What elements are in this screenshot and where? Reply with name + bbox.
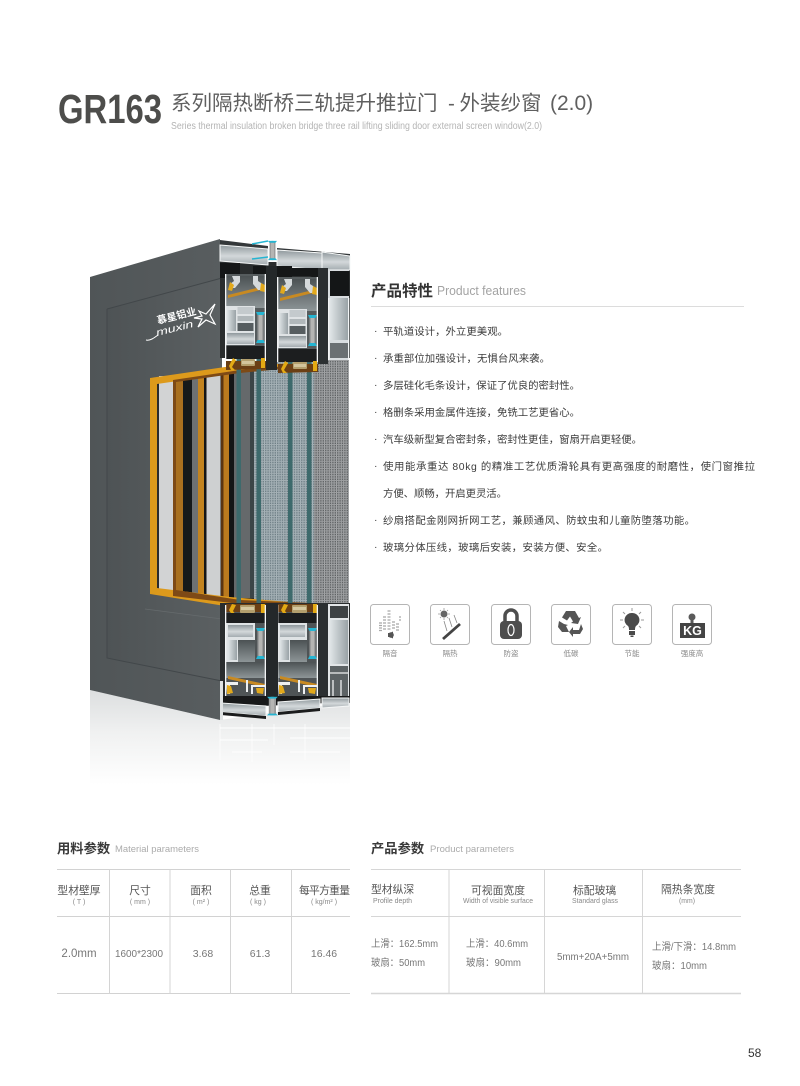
top rail [220, 245, 268, 265]
model number: GR163 [58, 86, 162, 132]
icon: sound insulation: 隔音 [382, 648, 398, 658]
brand logo: muxin [155, 319, 195, 339]
material table: ( kg/m² ) [311, 899, 337, 906]
icon: energy saving bulb [612, 604, 652, 658]
product table: 可视面宽度 [471, 883, 525, 897]
icon: energy saving bulb: 节能 [624, 648, 640, 658]
material table: 总重 [249, 883, 271, 897]
material heading: 用料参数 [57, 840, 111, 856]
material heading: Material parameters [115, 844, 199, 855]
product table: 5mm+20A+5mm [557, 952, 629, 963]
icon: anti-theft lock: 防盗 [504, 648, 519, 658]
material table: ( mm ) [130, 899, 150, 906]
material table: 型材壁厚 [57, 883, 101, 897]
chinese title: 外装纱窗 [460, 92, 542, 115]
features list: 格删条采用金属件连接，免铣工艺更省心。 [383, 406, 580, 419]
product table: (mm) [679, 896, 695, 905]
material heading [57, 840, 199, 856]
icon: heat insulation: 隔热 [442, 648, 458, 658]
orange thermal frame [150, 362, 312, 606]
icon: high strength weight: KG [683, 624, 702, 638]
features list: 平轨道设计，外立更美观。 [383, 325, 508, 338]
product table: 上滑：162.5mm [371, 938, 438, 950]
features heading [371, 281, 744, 307]
product table: 上滑：40.6mm [466, 938, 528, 950]
features list: · [374, 380, 377, 391]
material table: 3.68 [193, 948, 213, 960]
material table: 61.3 [250, 948, 270, 960]
top profile section [220, 240, 350, 373]
icon: low carbon recycling: 低碳 [564, 648, 579, 658]
icon: high strength weight [672, 604, 712, 658]
product table [371, 869, 741, 994]
insect screen mesh [254, 358, 349, 606]
product table: Width of visible surface [463, 896, 533, 905]
material table [57, 869, 350, 994]
material table: 16.46 [311, 948, 337, 960]
features list: · [374, 542, 377, 553]
features list: 方便、顺畅，开启更灵活。 [383, 487, 507, 500]
features list [374, 325, 756, 554]
panel: material parameters [57, 840, 350, 994]
dark aluminium frame face [90, 239, 220, 720]
features list: · [374, 353, 377, 364]
material table: ( kg ) [250, 899, 266, 906]
window opening with sashes [150, 350, 349, 612]
panel: performance icons [370, 604, 712, 658]
material table: 尺寸 [129, 883, 151, 897]
product heading: 产品参数 [371, 840, 425, 856]
features list: 使用能承重达 80kg 的精准工艺优质滑轮具有更高强度的耐磨性，使门窗推拉 [383, 460, 756, 473]
features list: · [374, 326, 377, 337]
product table: Profile depth [373, 896, 412, 905]
product table: 玻扇：50mm [371, 956, 425, 969]
product table: 型材纵深 [371, 882, 414, 896]
panel: product parameters [371, 840, 741, 994]
icon: anti-theft lock [492, 604, 530, 658]
floor reflection [90, 690, 350, 785]
icon: sound insulation [370, 604, 410, 658]
features list: · [374, 515, 377, 526]
icon: low carbon recycling [552, 604, 590, 658]
panel: product features [371, 281, 756, 554]
icon: heat insulation [430, 604, 470, 658]
page number: 58 [748, 1046, 762, 1060]
features list: · [374, 434, 377, 445]
features list: 汽车级新型复合密封条，密封性更佳，窗扇开启更轻便。 [383, 433, 642, 446]
right sash [318, 268, 328, 364]
brand logo: 慕星铝业 [156, 305, 198, 327]
glass panes [236, 350, 312, 612]
product table: 上滑/下滑：14.8mm [652, 941, 736, 953]
product table: 玻扇：10mm [652, 959, 707, 972]
title [58, 86, 593, 132]
features list: · [374, 407, 377, 418]
product table: 标配玻璃 [573, 883, 616, 897]
product heading [371, 840, 514, 856]
features list: 玻璃分体压线，玻璃后安装，安装方便、安全。 [383, 541, 608, 554]
product heading: Product parameters [430, 844, 514, 855]
chinese title: 系列隔热断桥三轨提升推拉门 [171, 92, 438, 115]
features heading: Product features [437, 284, 526, 298]
material table: ( T ) [73, 899, 85, 906]
icon: high strength weight: 强度高 [681, 648, 704, 658]
product cutaway illustration [90, 239, 350, 785]
material table: 1600*2300 [115, 948, 163, 960]
material table: 面积 [190, 884, 212, 897]
features list: 承重部位加强设计，无惧台风来袭。 [383, 352, 550, 365]
features list: · [374, 461, 377, 472]
product table: 玻扇：90mm [466, 956, 521, 969]
product table: Standard glass [572, 896, 618, 905]
product table: 隔热条宽度 [661, 882, 715, 896]
bottom profile section [220, 603, 350, 720]
bottom rail [220, 696, 350, 708]
material table: ( m² ) [193, 899, 209, 906]
brand logo [146, 304, 215, 340]
features list: 纱扇搭配金刚网折网工艺，兼顾通风、防蚊虫和儿童防堕落功能。 [383, 514, 695, 527]
chinese title: - [448, 92, 455, 115]
english subtitle: Series thermal insulation broken bridge three rail lifting sliding door external screen window(2.0) [171, 121, 542, 132]
chinese title: (2.0) [550, 92, 593, 115]
features heading: 产品特性 [371, 281, 433, 300]
features list: 多层硅化毛条设计，保证了优良的密封性。 [383, 379, 580, 392]
material table: 每平方重量 [299, 883, 350, 897]
material table: 2.0mm [61, 948, 97, 960]
